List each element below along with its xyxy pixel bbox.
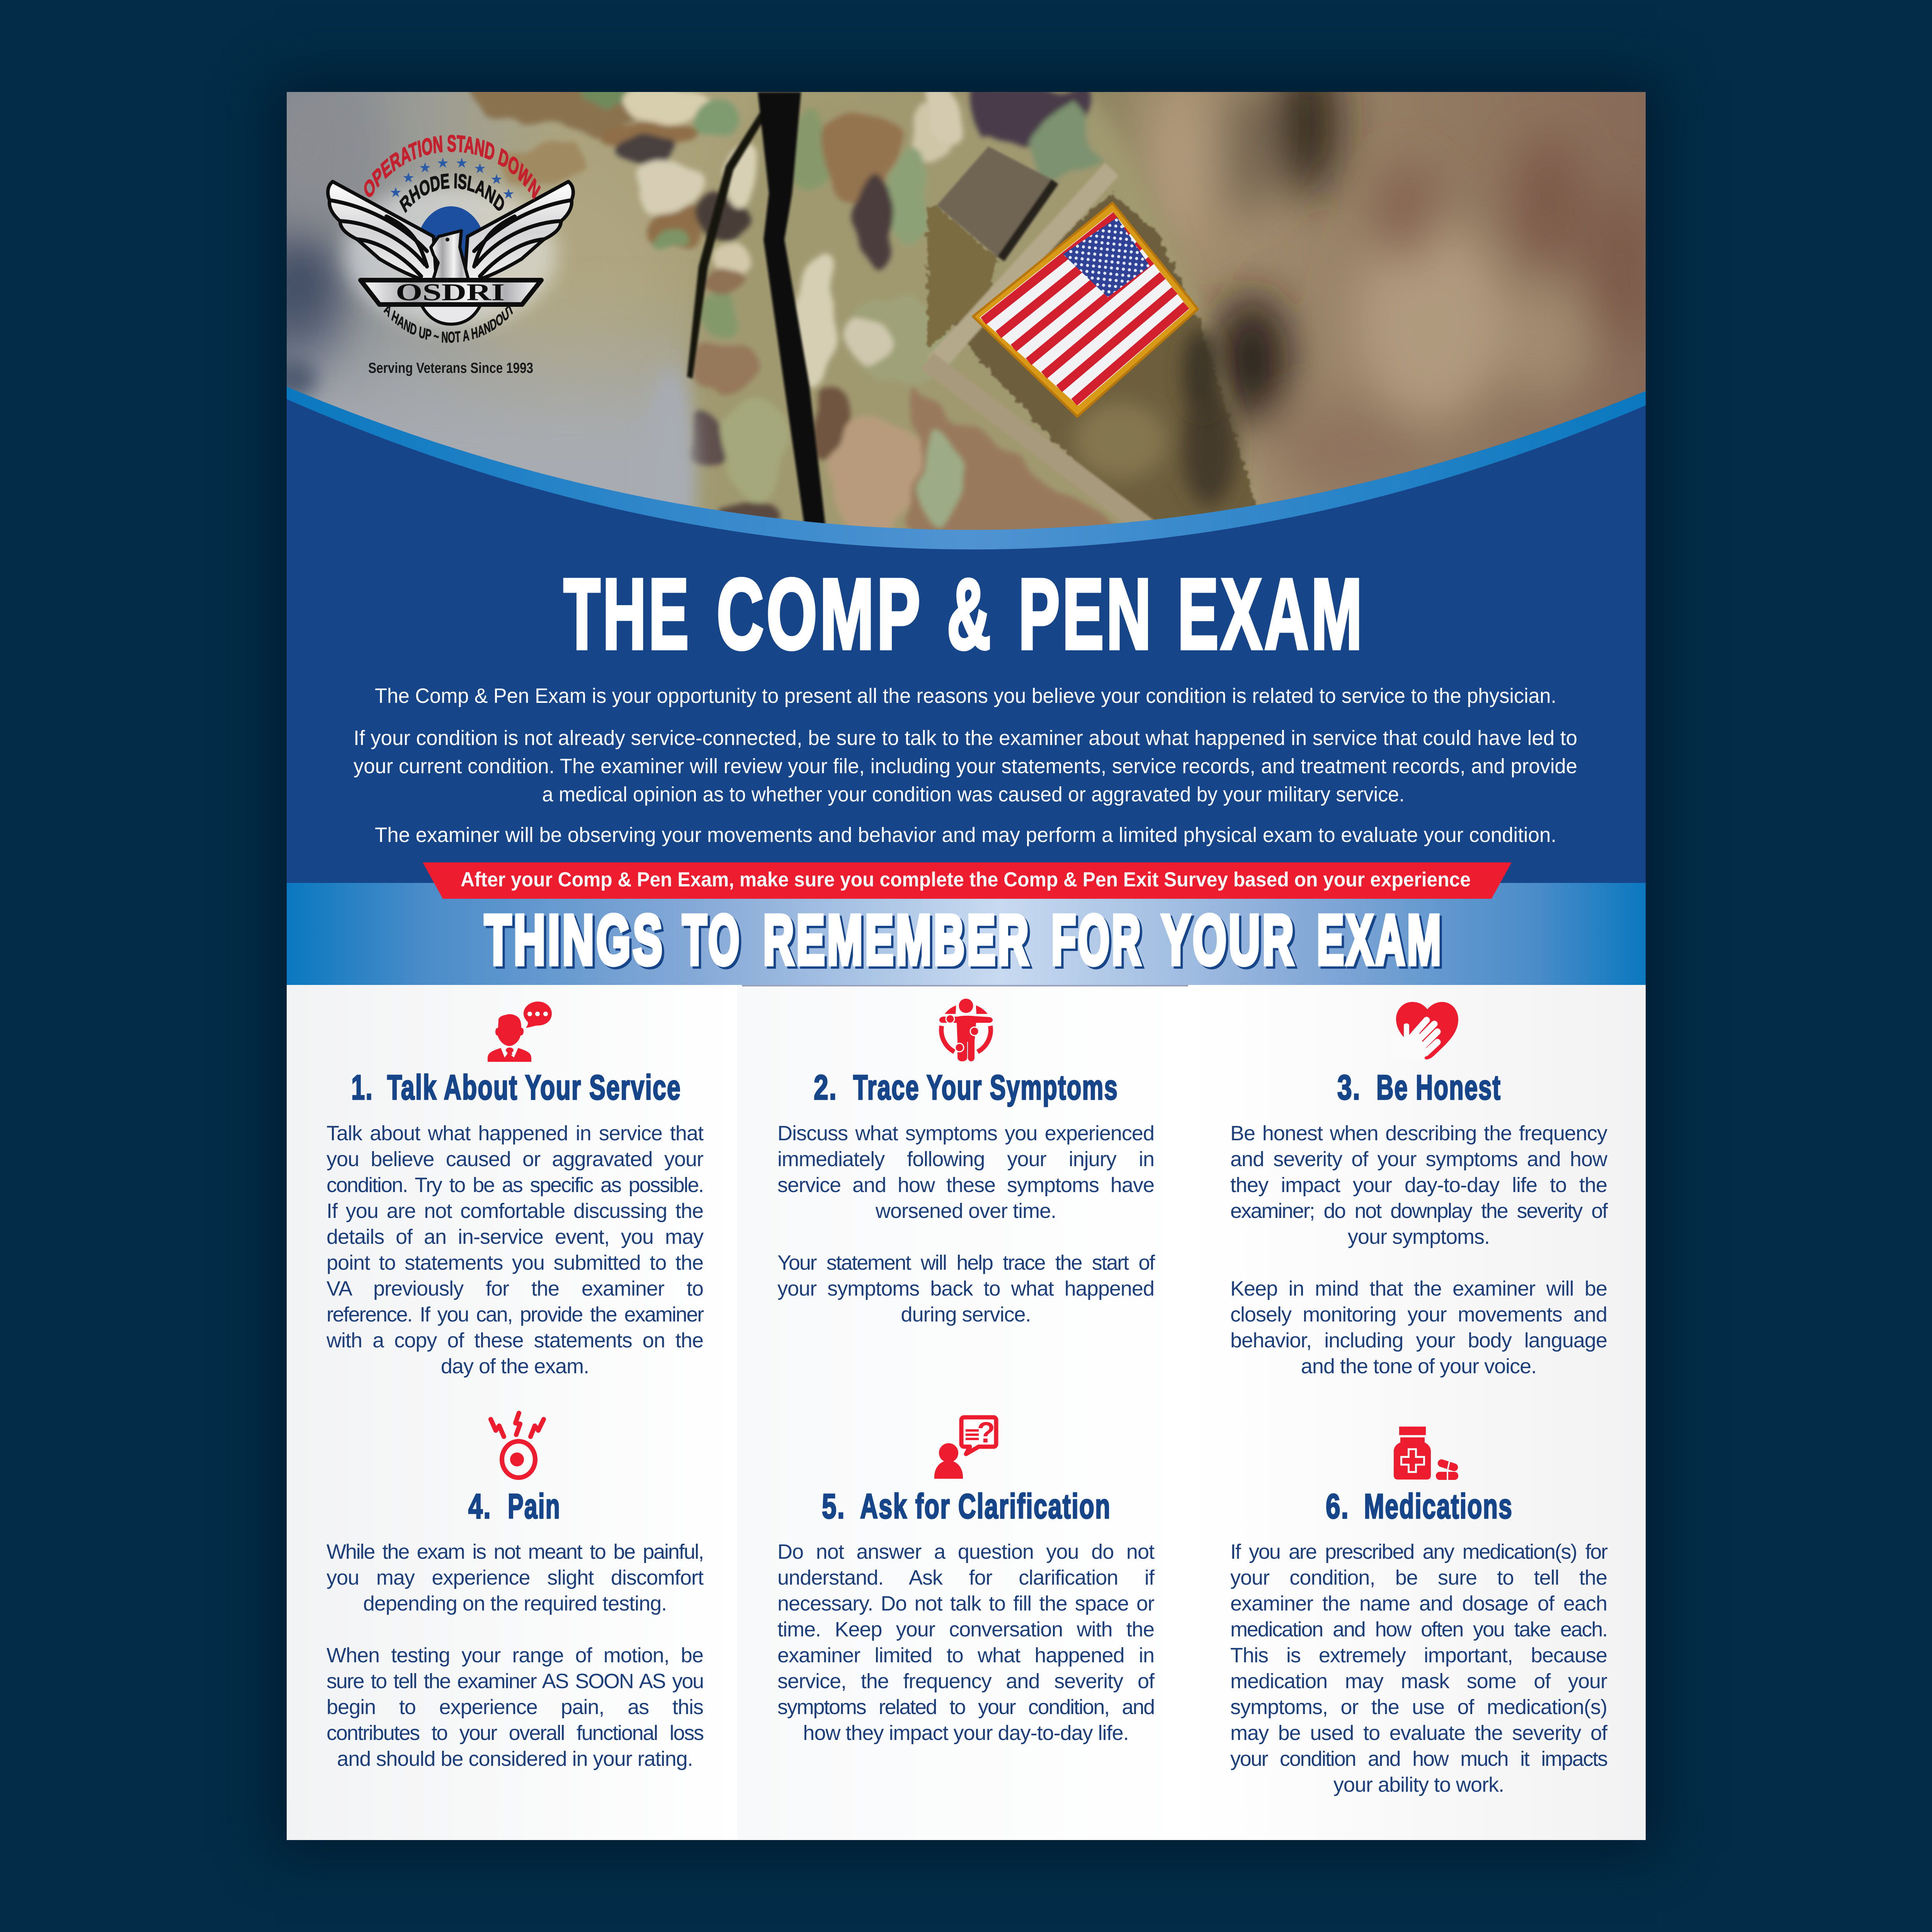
text block: medications: symptoms, or the use of medication(s) xyxy=(1230,1696,1607,1719)
text block: pain: sure to tell the examiner AS SOON AS you xyxy=(327,1670,703,1693)
text block: be honest: and severity of your symptoms and how xyxy=(1230,1148,1607,1171)
title: PEN xyxy=(1019,558,1154,670)
text block: ask for clarification: understand. Ask for clarification if xyxy=(777,1566,1154,1589)
text block: ask for clarification: necessary. Do not talk to fill the space or xyxy=(777,1592,1154,1615)
section heading with shadow: THINGS xyxy=(485,900,665,979)
text block: ask for clarification: time. Keep your conversation with the xyxy=(777,1618,1154,1641)
text block: be honest: Keep in mind that the examiner will be xyxy=(1230,1277,1607,1300)
intro text: If your condition is not already service-connected, be sure to talk to the examiner about what happened in service that could have led to xyxy=(354,726,1577,750)
text block: be honest xyxy=(1230,1121,1607,1379)
icon: person asking question: ? xyxy=(977,1416,995,1449)
logo halo xyxy=(344,184,557,327)
logo caption: Serving Veterans Since 1993 xyxy=(368,360,533,376)
text block: talk about your service: details of an in-service event, you may xyxy=(327,1225,703,1248)
title: COMP xyxy=(717,558,923,670)
text block: medications: medication may mask some of your xyxy=(1230,1670,1607,1693)
text block: medications: your condition, be sure to tell the xyxy=(1230,1566,1607,1589)
section heading with shadow: REMEMBER xyxy=(765,903,1033,981)
heading 2 xyxy=(814,1068,1118,1107)
section heading with shadow: FOR xyxy=(1051,900,1143,979)
banner text: After your Comp & Pen Exam, make sure you complete the Comp & Pen Exit Survey based on your experience xyxy=(461,868,1471,891)
logo stars: ★ xyxy=(402,170,415,186)
text block: pain: contributes to your overall functional loss xyxy=(327,1721,703,1745)
text block: be honest: your symptoms. xyxy=(1348,1225,1490,1248)
text block: pain: depending on the required testing. xyxy=(363,1592,667,1615)
text block: ask for clarification xyxy=(777,1539,1154,1746)
text block: medications: your condition and how much it impacts xyxy=(1230,1747,1607,1770)
text block: pain: begin to experience pain, as this xyxy=(327,1696,703,1719)
logo stars: ★ xyxy=(437,155,449,171)
text block: trace your symptoms: your symptoms back to what happened xyxy=(777,1277,1154,1300)
heading 6: 6. xyxy=(1326,1487,1349,1526)
text block: ask for clarification: Do not answer a question you do not xyxy=(777,1540,1154,1563)
title: THE xyxy=(564,558,691,670)
text block: be honest: examiner; do not downplay the severity of xyxy=(1230,1199,1607,1223)
section heading with shadow: EXAM xyxy=(1317,900,1443,979)
text block: trace your symptoms: service and how these symptoms have xyxy=(777,1173,1154,1197)
text block: talk about your service: condition. Try to be as specific as possible. xyxy=(327,1173,703,1197)
icon: person speaking xyxy=(488,1002,552,1062)
text block: trace your symptoms: immediately following your injury in xyxy=(777,1148,1154,1171)
text block: talk about your service: If you are not comfortable discussing the xyxy=(327,1199,703,1223)
logo stars: ★ xyxy=(419,160,431,176)
heading 5: 5. xyxy=(822,1487,845,1526)
logo stars: ★ xyxy=(474,161,486,177)
text block: medications: examiner the name and dosage of each xyxy=(1230,1592,1607,1615)
intro text: The examiner will be observing your movements and behavior and may perform a limited physical exam to evaluate your condition. xyxy=(375,823,1556,847)
logo stars: ★ xyxy=(389,185,402,201)
logo stars xyxy=(389,155,515,202)
section heading with shadow: THINGS xyxy=(487,903,667,981)
text block: ask for clarification: how they impact your day-to-day life. xyxy=(803,1721,1129,1745)
section heading with shadow: EXAM xyxy=(1319,903,1446,981)
logo stars: ★ xyxy=(456,155,468,171)
text block: trace your symptoms: during service. xyxy=(901,1303,1031,1326)
title: EXAM xyxy=(1178,558,1365,670)
heading 5: Ask for Clarification xyxy=(860,1487,1111,1526)
heading 2: 2. xyxy=(814,1068,837,1107)
logo stars: ★ xyxy=(490,172,503,187)
column backgrounds xyxy=(287,985,1646,1840)
heading 4: 4. xyxy=(468,1487,492,1526)
logo text: a hand up not a handout: A HAND UP ~ NOT A HANDOUT xyxy=(382,299,516,346)
intro text: The Comp & Pen Exam is your opportunity to present all the reasons you believe your condition is related to service to the physician. xyxy=(375,684,1556,707)
text block: be honest: Be honest when describing the frequency xyxy=(1230,1122,1607,1145)
text block: pain: While the exam is not meant to be painful, xyxy=(327,1540,703,1563)
intro text xyxy=(354,684,1577,847)
section heading with shadow: TO xyxy=(685,903,744,981)
text block: talk about your service: reference. If you can, provide the examiner xyxy=(327,1303,703,1326)
text block: pain xyxy=(327,1539,703,1772)
text block: trace your symptoms: Your statement will help trace the start of xyxy=(777,1251,1154,1274)
text block: medications: This is extremely important, because xyxy=(1230,1644,1607,1667)
text block: pain: When testing your range of motion, be xyxy=(327,1644,703,1667)
soft fog over jacket edge xyxy=(647,367,694,576)
icon: pain target with bolts xyxy=(491,1413,544,1478)
text block: talk about your service: point to statements you submitted to the xyxy=(327,1251,703,1274)
text block: medications: If you are prescribed any medication(s) for xyxy=(1230,1540,1607,1563)
logo: Operation Stand Down Rhode Island xyxy=(0,131,573,376)
text block: talk about your service: VA previously for the examiner to xyxy=(327,1277,703,1300)
logo eagle body xyxy=(431,231,469,282)
title: & xyxy=(947,558,993,670)
section heading with shadow: YOUR xyxy=(1164,903,1298,981)
intro text: your current condition. The examiner will review your file, including your statements, service records, and treatment records, and provide xyxy=(354,755,1577,778)
text block: medications: your ability to work. xyxy=(1333,1773,1504,1796)
text block: ask for clarification: symptoms related to your condition, and xyxy=(777,1696,1154,1719)
icon: body with pain points xyxy=(939,998,993,1061)
heading 5 xyxy=(822,1487,1111,1526)
icon: american flag patch xyxy=(973,203,1198,417)
heading 3 xyxy=(1337,1068,1501,1107)
logo text: rhode island: RHODE ISLAND xyxy=(397,169,508,217)
text block: be honest: behavior, including your body language xyxy=(1230,1329,1607,1352)
heading 3: 3. xyxy=(1337,1068,1361,1107)
header photo: soldier sleeve with flag patch xyxy=(287,92,1646,530)
text block: be honest: closely monitoring your movements and xyxy=(1230,1303,1607,1326)
logo stars: ★ xyxy=(502,186,515,202)
heading 4 xyxy=(468,1487,561,1526)
gradient strip xyxy=(287,883,1646,985)
section heading with shadow: TO xyxy=(682,900,742,979)
text block: ask for clarification: service, the frequency and severity of xyxy=(777,1670,1154,1693)
logo text: operation stand down: OPERATION STAND DOWN xyxy=(361,131,543,204)
curved light-blue band under photo xyxy=(287,387,1646,549)
text block: trace your symptoms: worsened over time. xyxy=(876,1199,1056,1223)
poster artwork xyxy=(287,92,1646,1840)
title xyxy=(564,558,1365,670)
text block: pain: you may experience slight discomfort xyxy=(327,1566,703,1589)
text block: talk about your service xyxy=(327,1121,703,1379)
heading 3: Be Honest xyxy=(1376,1068,1501,1107)
section heading with shadow: YOUR xyxy=(1162,900,1296,979)
text block: medications: may be used to evaluate the severity of xyxy=(1230,1721,1607,1745)
text block: ask for clarification: examiner limited to what happened in xyxy=(777,1644,1154,1667)
heading 6 xyxy=(1326,1487,1513,1526)
logo OSDRI banner xyxy=(361,280,541,304)
heading 6: Medications xyxy=(1364,1487,1513,1526)
text block: pain: and should be considered in your rating. xyxy=(337,1747,693,1770)
logo blue sun xyxy=(417,206,485,270)
icon: person asking question xyxy=(934,1416,996,1479)
text block: talk about your service: with a copy of these statements on the xyxy=(327,1329,703,1352)
section heading with shadow: FOR xyxy=(1054,903,1145,981)
logo tail xyxy=(421,304,481,324)
text block: be honest: and the tone of your voice. xyxy=(1301,1355,1536,1378)
text block: trace your symptoms xyxy=(777,1121,1154,1328)
text block: medications: medication and how often you take each. xyxy=(1230,1618,1607,1641)
section heading with shadow: REMEMBER xyxy=(763,900,1031,979)
heading 2: Trace Your Symptoms xyxy=(853,1068,1118,1107)
icon: medication bottle and pills xyxy=(1394,1427,1459,1481)
heading 1: Talk About Your Service xyxy=(387,1068,681,1107)
intro text: a medical opinion as to whether your condition was caused or aggravated by your military service. xyxy=(542,783,1405,806)
fog over lower left of photo xyxy=(287,301,696,507)
heading 1: 1. xyxy=(351,1068,373,1107)
section heading with shadow xyxy=(485,900,1446,981)
text block: talk about your service: Talk about what happened in service that xyxy=(327,1122,703,1145)
logo text: OSDRI: OSDRI xyxy=(396,279,505,306)
icon: hand on heart xyxy=(1391,1002,1458,1060)
logo eagle wings xyxy=(328,182,573,324)
text block: be honest: they impact your day-to-day life to the xyxy=(1230,1173,1607,1197)
poster blue body xyxy=(287,92,1646,888)
text block: talk about your service: day of the exam. xyxy=(441,1355,589,1378)
red banner xyxy=(423,862,1512,899)
text block: talk about your service: you believe caused or aggravated your xyxy=(327,1148,703,1171)
heading 4: Pain xyxy=(508,1487,561,1526)
text block: trace your symptoms: Discuss what symptoms you experienced xyxy=(777,1122,1154,1145)
heading 1 xyxy=(351,1068,681,1107)
text block: medications xyxy=(1230,1539,1607,1798)
